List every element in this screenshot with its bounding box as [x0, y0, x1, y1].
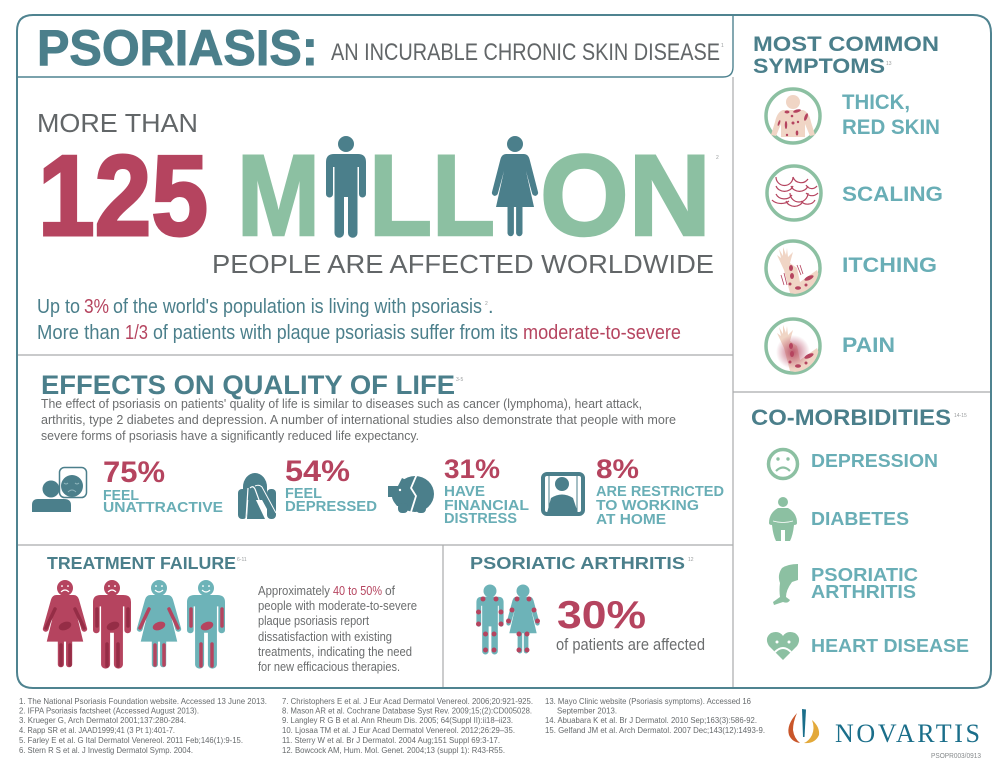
stat: 31%: FINANCIAL: [444, 498, 529, 514]
icon: leg: [773, 564, 798, 605]
reference mark: 13: [886, 61, 892, 67]
stat: 31%: DISTRESS: [444, 511, 517, 527]
icon: broken piggy bank: [388, 474, 434, 513]
co-morbidity labels: DIABETES: [811, 508, 909, 529]
references: [19, 696, 765, 755]
symptom labels: RED SKIN: [842, 116, 940, 139]
paragraph: 40 to 50%: [333, 583, 382, 598]
logo: Novartis: [788, 709, 981, 760]
icon: man: [326, 136, 366, 238]
million word with people as the letter I: M: [237, 132, 320, 260]
125: 125: [38, 133, 208, 260]
panel: psoriatic arthritis: [470, 553, 705, 655]
million word with people as the letter I: ON: [540, 132, 711, 260]
paragraph: dissatisfaction with existing: [258, 629, 392, 644]
icon: woman with joints: [506, 584, 540, 653]
symptom labels: PAIN: [842, 334, 895, 357]
icon: sad heart: [767, 632, 799, 660]
references: 3. Krueger G, Arch Dermatol 2001;137:280-284.: [19, 715, 186, 725]
icon: thick red skin: [766, 89, 820, 143]
population statement: of the world's population is living with psoriasis: [113, 296, 482, 318]
stat: 8%: AT HOME: [596, 512, 666, 528]
icon: happy woman: [137, 580, 181, 667]
icon: unhappy man: [93, 580, 131, 669]
heading: TREATMENT FAILURE: [47, 553, 236, 573]
stat: 8%: 8%: [596, 454, 639, 484]
panel: effects on quality of life: [32, 370, 724, 528]
references: 8. Mason AR et al. Cochrane Database Syst Rev. 2009;15;(2):CD005028.: [282, 706, 532, 716]
reference mark: 3-5: [456, 377, 463, 383]
references: 6. Stern R S et al. J Investig Dermatol Symp. 2004.: [19, 745, 193, 755]
million word with people as the letter I: LL: [369, 132, 495, 260]
stat: 75%: FEEL: [103, 488, 139, 504]
icon: man with joints: [476, 584, 504, 655]
icon: woman: [492, 136, 538, 236]
population statement: .: [488, 296, 494, 318]
header: [37, 20, 724, 76]
reference mark 1: 1: [721, 43, 724, 49]
icon: pain: [766, 319, 822, 373]
people affected: PEOPLE ARE AFFECTED WORLDWIDE: [212, 251, 714, 279]
population statement: 2: [485, 301, 488, 307]
reference mark: 12: [688, 557, 694, 563]
co-morbidity labels: [811, 450, 969, 656]
stat caption: of patients are affected: [556, 636, 705, 654]
million word with people as the letter I: [237, 132, 711, 260]
stat: 54%: DEPRESSED: [285, 499, 377, 515]
subtitle: AN INCURABLE CHRONIC SKIN DISEASE: [331, 39, 720, 66]
heading: PSORIATIC ARTHRITIS: [470, 553, 685, 573]
co-morbidity labels: DEPRESSION: [811, 450, 938, 471]
references: September 2013.: [557, 706, 617, 716]
panel: most common symptoms: [753, 33, 943, 373]
population statement: 1/3: [125, 322, 148, 344]
paragraph: people with moderate-to-severe: [258, 598, 417, 613]
co-morbidity labels: ARTHRITIS: [811, 581, 916, 602]
heading: [753, 33, 939, 78]
heading: CO-MORBIDITIES: [751, 405, 951, 430]
co-morbidity labels: HEART DISEASE: [811, 635, 969, 656]
population statement: [37, 296, 681, 344]
icon: sad face: [768, 450, 798, 478]
reference mark: 14-15: [954, 413, 967, 419]
paragraph: [258, 583, 417, 674]
stat: 75%: UNATTRACTIVE: [103, 500, 223, 516]
symptom labels: [842, 91, 943, 357]
body text: [41, 396, 676, 443]
stat: 30%: 30%: [557, 594, 646, 637]
co-morbidity labels: PSORIATIC: [811, 564, 918, 585]
paragraph: for new efficacious therapies.: [258, 659, 400, 674]
stat: 54%: [285, 455, 377, 515]
stat: 31%: [444, 454, 529, 527]
references: 4. Rapp SR et al. JAAD1999;41 (3 Pt 1):401-7.: [19, 725, 175, 735]
heading: EFFECTS ON QUALITY OF LIFE: [41, 370, 455, 400]
icon: happy man: [187, 580, 225, 669]
references: 13. Mayo Clinic website (Psoriasis symptoms). Accessed 16: [545, 696, 751, 706]
reference mark: 6-11: [237, 557, 247, 563]
icon: itching: [766, 241, 822, 295]
stat: 8%: ARE RESTRICTED: [596, 484, 724, 500]
panel: 125 million headline: [37, 108, 719, 279]
icon: overweight person: [769, 497, 797, 541]
stat: 54%: FEEL: [285, 486, 322, 502]
more than: MORE THAN: [37, 108, 198, 138]
stat: 31%: 31%: [444, 454, 500, 484]
job code: PSOPR003/0913: [931, 751, 981, 760]
panel: co-morbidities: [751, 405, 969, 660]
paragraph: treatments, indicating the need: [258, 644, 412, 659]
stat: 75%: [103, 456, 223, 516]
references: 15. Gelfand JM et al. Arch Dermatol. 2007 Dec;143(12):1493-9.: [545, 725, 765, 735]
population statement: of patients with plaque psoriasis suffer from its: [153, 322, 518, 344]
references: 14. Abuabara K et al. Br J Dermatol. 2010 Sep;163(3):586-92.: [545, 715, 757, 725]
paragraph: of: [385, 583, 395, 598]
heading: MOST COMMON: [753, 33, 939, 56]
references: 2. IFPA Psoriasis factsheet (Accessed August 2013).: [19, 706, 199, 716]
icon: depressed person: [238, 473, 276, 519]
body text: severe forms of psoriasis have a significantly reduced life expectancy.: [41, 428, 419, 443]
symptom labels: SCALING: [842, 183, 943, 206]
stat: 8%: [596, 454, 724, 528]
references: 12. Bowcock AM, Hum. Mol. Genet. 2004;13 (suppl 1): R43-R55.: [282, 745, 505, 755]
icon: person looking in mirror: [32, 468, 86, 512]
references: 10. Ljosaa TM et al. J Eur Acad Dermatol Venereol. 2012;26:29–35.: [282, 725, 515, 735]
wordmark: NOVARTIS: [835, 719, 980, 748]
flame mark: [788, 709, 819, 743]
references: 9. Langley R G B et al. Ann Rheum Dis. 2005; 64(Suppl II):ii18–ii23.: [282, 715, 513, 725]
references: 11. Sterry W et al. Br J Dermatol. 2004 Aug;151 Suppl 69:3-17.: [282, 735, 500, 745]
references: 5. Farley E et al. G Ital Dermatol Venereol. 2011 Feb;146(1):9-15.: [19, 735, 243, 745]
body text: The effect of psoriasis on patients' quality of life is similar to diseases such as cancer (lymphoma), heart attack,: [41, 396, 642, 411]
population statement: Up to: [37, 296, 80, 318]
stat: 31%: HAVE: [444, 484, 485, 500]
panel: treatment failure: [43, 553, 417, 674]
symptom labels: ITCHING: [842, 254, 937, 277]
population statement: 3%: [84, 296, 109, 318]
paragraph: plaque psoriasis report: [258, 613, 369, 628]
population statement: More than: [37, 322, 120, 344]
reference mark 2: 2: [716, 155, 719, 161]
references: 7. Christophers E et al. J Eur Acad Dermatol Venereol. 2006;20:921-925.: [282, 696, 533, 706]
icon: unhappy woman: [43, 580, 87, 667]
population statement: moderate-to-severe: [523, 322, 681, 344]
stat: 75%: 75%: [103, 456, 165, 489]
paragraph: Approximately: [258, 583, 330, 598]
icon: person behind window: [543, 474, 583, 514]
stat: 8%: TO WORKING: [596, 498, 699, 514]
body text: arthritis, type 2 diabetes and depression. A number of international studies also demonstrate that people with more: [41, 412, 676, 427]
stat: 54%: 54%: [285, 455, 350, 488]
references: 1. The National Psoriasis Foundation website. Accessed 13 June 2013.: [19, 696, 267, 706]
symptom labels: THICK,: [842, 91, 910, 114]
icon: scaling: [767, 166, 821, 220]
heading: SYMPTOMS: [753, 55, 885, 78]
title: PSORIASIS:: [37, 20, 318, 76]
